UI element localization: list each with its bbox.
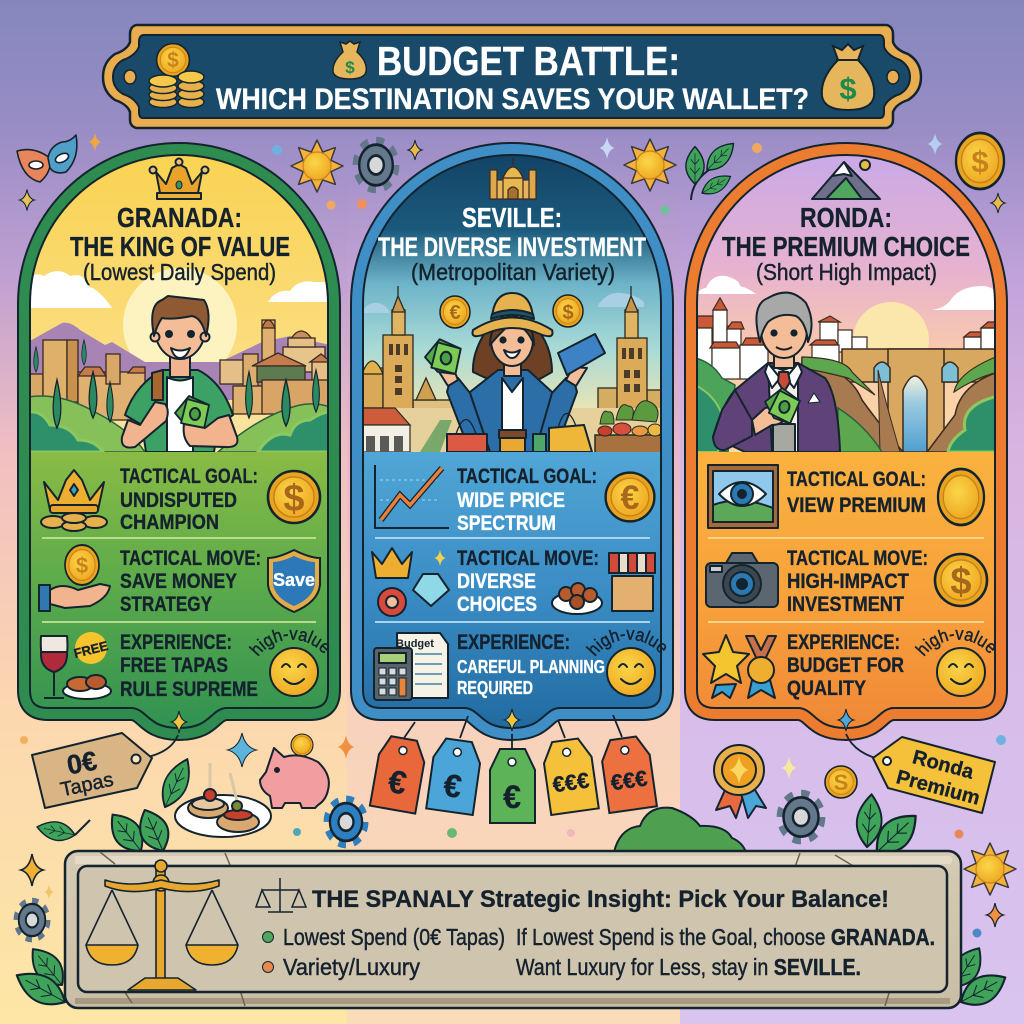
tag: green euro bbox=[490, 749, 535, 823]
Seville row 1: TACTICAL GOAL: bbox=[457, 465, 597, 488]
panel: strategic insight bbox=[65, 851, 961, 1008]
Ronda sky bbox=[698, 156, 994, 452]
Ronda row 3 bbox=[702, 630, 994, 700]
Ronda row 1: TACTICAL GOAL: bbox=[787, 468, 926, 491]
Ronda row 2: INVESTMENT bbox=[787, 593, 904, 616]
legend row 1: Lowest Spend (0€ Tapas) bbox=[283, 924, 505, 950]
Ronda heading: RONDA: bbox=[800, 202, 892, 233]
Ronda heading: (Short High Impact) bbox=[756, 259, 937, 285]
Seville heading: (Metropolitan Variety) bbox=[411, 259, 615, 285]
tag: red euro bbox=[370, 735, 428, 814]
icon: camera bbox=[706, 553, 778, 607]
Seville row 3: REQUIRED bbox=[457, 678, 533, 698]
price tags bbox=[370, 715, 657, 823]
title line 2: WHICH DESTINATION SAVES YOUR WALLET? bbox=[216, 83, 809, 116]
icon: carnival masks bbox=[17, 135, 77, 182]
insight line 2: Want Luxury for Less, stay in SEVILLE. bbox=[516, 954, 861, 980]
Granada row 2: TACTICAL MOVE: bbox=[120, 547, 261, 570]
icon: plain coin bbox=[938, 469, 984, 525]
tag: Ronda premium: Ronda bbox=[910, 746, 977, 784]
icon: smiley with high-value bbox=[914, 630, 994, 697]
Granada heading: GRANADA: bbox=[117, 202, 242, 233]
icon: smiley with high-value: high-value bbox=[586, 630, 666, 656]
Seville row 2: CHOICES bbox=[457, 593, 537, 616]
Granada row 3: EXPERIENCE: bbox=[120, 631, 232, 654]
icon: large money bag bbox=[822, 44, 874, 110]
icon: tapas plate bbox=[63, 675, 111, 699]
icon: price chart bbox=[375, 465, 449, 528]
icon: dollar coin: $ bbox=[950, 561, 972, 603]
icon: eye picture bbox=[708, 465, 778, 528]
title line 1: BUDGET BATTLE: bbox=[377, 38, 680, 84]
Granada row 1: TACTICAL GOAL: bbox=[120, 465, 258, 488]
Seville frame bbox=[357, 149, 667, 734]
Ronda scene bbox=[695, 276, 998, 454]
icon: smiley with high-value bbox=[248, 630, 330, 697]
panel: Ronda bbox=[684, 142, 1008, 741]
Granada heading: (Lowest Daily Spend) bbox=[83, 259, 276, 285]
icon: save shield bbox=[268, 550, 320, 612]
Seville info band bbox=[364, 452, 660, 727]
icon: euro coin bbox=[606, 473, 654, 521]
insight title: THE SPANALY Strategic Insight: Pick Your Balance! bbox=[312, 886, 889, 913]
icon: coin top right bbox=[956, 133, 1004, 189]
icon: coins in scene: $ bbox=[562, 302, 574, 324]
Granada row 1 bbox=[41, 465, 320, 534]
icon: tapas plate bbox=[175, 763, 271, 837]
icon: small money bag bbox=[333, 41, 366, 79]
Seville heading bbox=[378, 202, 646, 285]
Granada info band bbox=[31, 452, 327, 727]
tag: orange euros bbox=[599, 735, 657, 813]
Granada frame bbox=[24, 149, 334, 734]
Granada character bbox=[122, 296, 238, 452]
Granada heading: THE KING OF VALUE bbox=[70, 231, 290, 262]
panel: Granada bbox=[17, 142, 341, 741]
decorations around arches bbox=[17, 133, 1005, 214]
icon: smiley with high-value: high-value bbox=[914, 630, 994, 656]
icon: coins in scene bbox=[440, 295, 583, 328]
icon: dollar coin bbox=[935, 554, 987, 606]
Granada scene bbox=[28, 268, 332, 452]
Seville emblem: cathedral bbox=[490, 158, 536, 199]
insight title icon bbox=[256, 878, 306, 912]
icon: dollar coin bbox=[268, 471, 320, 523]
Seville heading: SEVILLE: bbox=[462, 202, 562, 233]
Ronda row 2: TACTICAL MOVE: bbox=[787, 547, 928, 570]
icon: free badge: FREE bbox=[72, 638, 110, 661]
Granada row 2 bbox=[39, 545, 320, 616]
Ronda row 1 bbox=[708, 465, 984, 528]
icon: crown diamond ring bbox=[372, 548, 449, 616]
icon: large money bag: $ bbox=[839, 71, 857, 106]
tag: green euro: € bbox=[503, 779, 521, 815]
Seville row 2: DIVERSE bbox=[457, 570, 536, 593]
icon: smiley with high-value bbox=[586, 630, 666, 697]
Granada row 2: SAVE MONEY bbox=[120, 570, 237, 593]
Ronda row 3: BUDGET FOR bbox=[787, 654, 904, 677]
Seville sky bbox=[364, 156, 660, 408]
Ronda row 3: QUALITY bbox=[787, 677, 866, 700]
icon: coin stack bbox=[149, 44, 204, 108]
icon: leaf sprig bbox=[686, 138, 739, 200]
Granada row 3: RULE SUPREME bbox=[120, 678, 258, 701]
Seville row 1 bbox=[375, 465, 654, 535]
tag: yellow euros bbox=[541, 737, 599, 815]
icon: balance scale bbox=[86, 860, 238, 990]
icon: crown with coins bbox=[41, 470, 107, 531]
Ronda row 3: EXPERIENCE: bbox=[787, 631, 900, 654]
Seville row 1: WIDE PRICE bbox=[457, 489, 565, 512]
icon: leaves left bbox=[35, 754, 197, 859]
icon: bush bbox=[614, 808, 746, 852]
tag: orange euros: €€€ bbox=[609, 765, 649, 795]
Seville row 2 bbox=[372, 547, 655, 616]
Ronda row 2 bbox=[706, 547, 987, 616]
Seville row 3 bbox=[373, 630, 666, 701]
Granada tab sparkle bbox=[171, 711, 187, 733]
icon: market stall bbox=[609, 553, 655, 611]
icon: coins in scene: € bbox=[449, 302, 461, 324]
Granada row 1: CHAMPION bbox=[120, 511, 219, 534]
Ronda heading bbox=[722, 202, 970, 285]
panel: Seville bbox=[350, 142, 674, 741]
tag: 0 euro tapas: Tapas bbox=[59, 769, 115, 801]
icon: hand with coin bbox=[39, 545, 110, 611]
banner end dots bbox=[124, 70, 899, 84]
Seville heading: THE DIVERSE INVESTMENT bbox=[378, 232, 646, 262]
icon: smiley with high-value: high-value bbox=[248, 630, 330, 656]
icon: coin top right: $ bbox=[971, 144, 989, 179]
Granada row 2: STRATEGY bbox=[120, 593, 212, 616]
Ronda frame bbox=[691, 149, 1001, 734]
insight line 1: If Lowest Spend is the Goal, choose GRANADA. bbox=[516, 924, 935, 950]
Seville row 3: EXPERIENCE: bbox=[457, 631, 570, 654]
Seville row 2: TACTICAL MOVE: bbox=[457, 547, 599, 570]
icon: coin stack: $ bbox=[167, 49, 179, 72]
icon: tapas bbox=[552, 583, 602, 614]
icon: dollar coin: $ bbox=[283, 478, 305, 520]
tag: 0 euro tapas: 0€ bbox=[65, 746, 99, 780]
Seville scene bbox=[350, 286, 670, 456]
title banner bbox=[103, 25, 921, 128]
tag: Ronda premium bbox=[846, 734, 995, 813]
Ronda row 1: VIEW PREMIUM bbox=[787, 494, 926, 517]
icon: save shield: Save bbox=[273, 570, 315, 590]
Seville row 3: CAREFUL PLANNING bbox=[457, 657, 605, 677]
Granada row 3 bbox=[40, 630, 330, 701]
lower decorations bbox=[11, 733, 1016, 1013]
tag: blue euro bbox=[426, 737, 483, 815]
Granada row 3: FREE TAPAS bbox=[120, 654, 228, 677]
icon: piggy bank bbox=[260, 734, 329, 808]
legend row 2: Variety/Luxury bbox=[283, 954, 420, 980]
Seville character bbox=[425, 293, 605, 452]
Ronda row 2: HIGH-IMPACT bbox=[787, 570, 909, 593]
tag: red euro: € bbox=[386, 763, 410, 801]
Ronda character bbox=[713, 293, 840, 452]
Granada emblem: crown bbox=[150, 158, 208, 199]
icon: star and medal bbox=[703, 635, 776, 698]
Ronda info band bbox=[698, 452, 994, 727]
icon: rosette bbox=[714, 745, 766, 818]
icon: budget document and calculator: Budget bbox=[396, 638, 434, 650]
icon: hand with coin: $ bbox=[76, 553, 88, 578]
icon: euro coin: € bbox=[621, 479, 640, 517]
tag: Ronda premium: Premium bbox=[894, 766, 982, 810]
icon: wine glass bbox=[41, 636, 67, 698]
Ronda cliffs bbox=[800, 358, 903, 452]
tag: 0 euro tapas bbox=[32, 733, 178, 808]
Seville row 1: SPECTRUM bbox=[457, 512, 556, 535]
Ronda tab sparkle bbox=[838, 709, 854, 731]
tag: yellow euros: €€€ bbox=[551, 768, 591, 797]
icon: budget document and calculator bbox=[374, 633, 448, 700]
lower decorations: S bbox=[834, 770, 848, 795]
icon: small money bag: $ bbox=[345, 58, 355, 77]
Seville tab sparkle bbox=[504, 709, 520, 731]
Granada heading bbox=[70, 202, 290, 285]
Granada sky bbox=[31, 156, 327, 452]
Ronda bridge bbox=[842, 349, 998, 454]
Granada row 1: UNDISPUTED bbox=[120, 489, 237, 512]
Ronda emblem: mountain bbox=[812, 160, 880, 199]
tag: blue euro: € bbox=[441, 767, 464, 805]
